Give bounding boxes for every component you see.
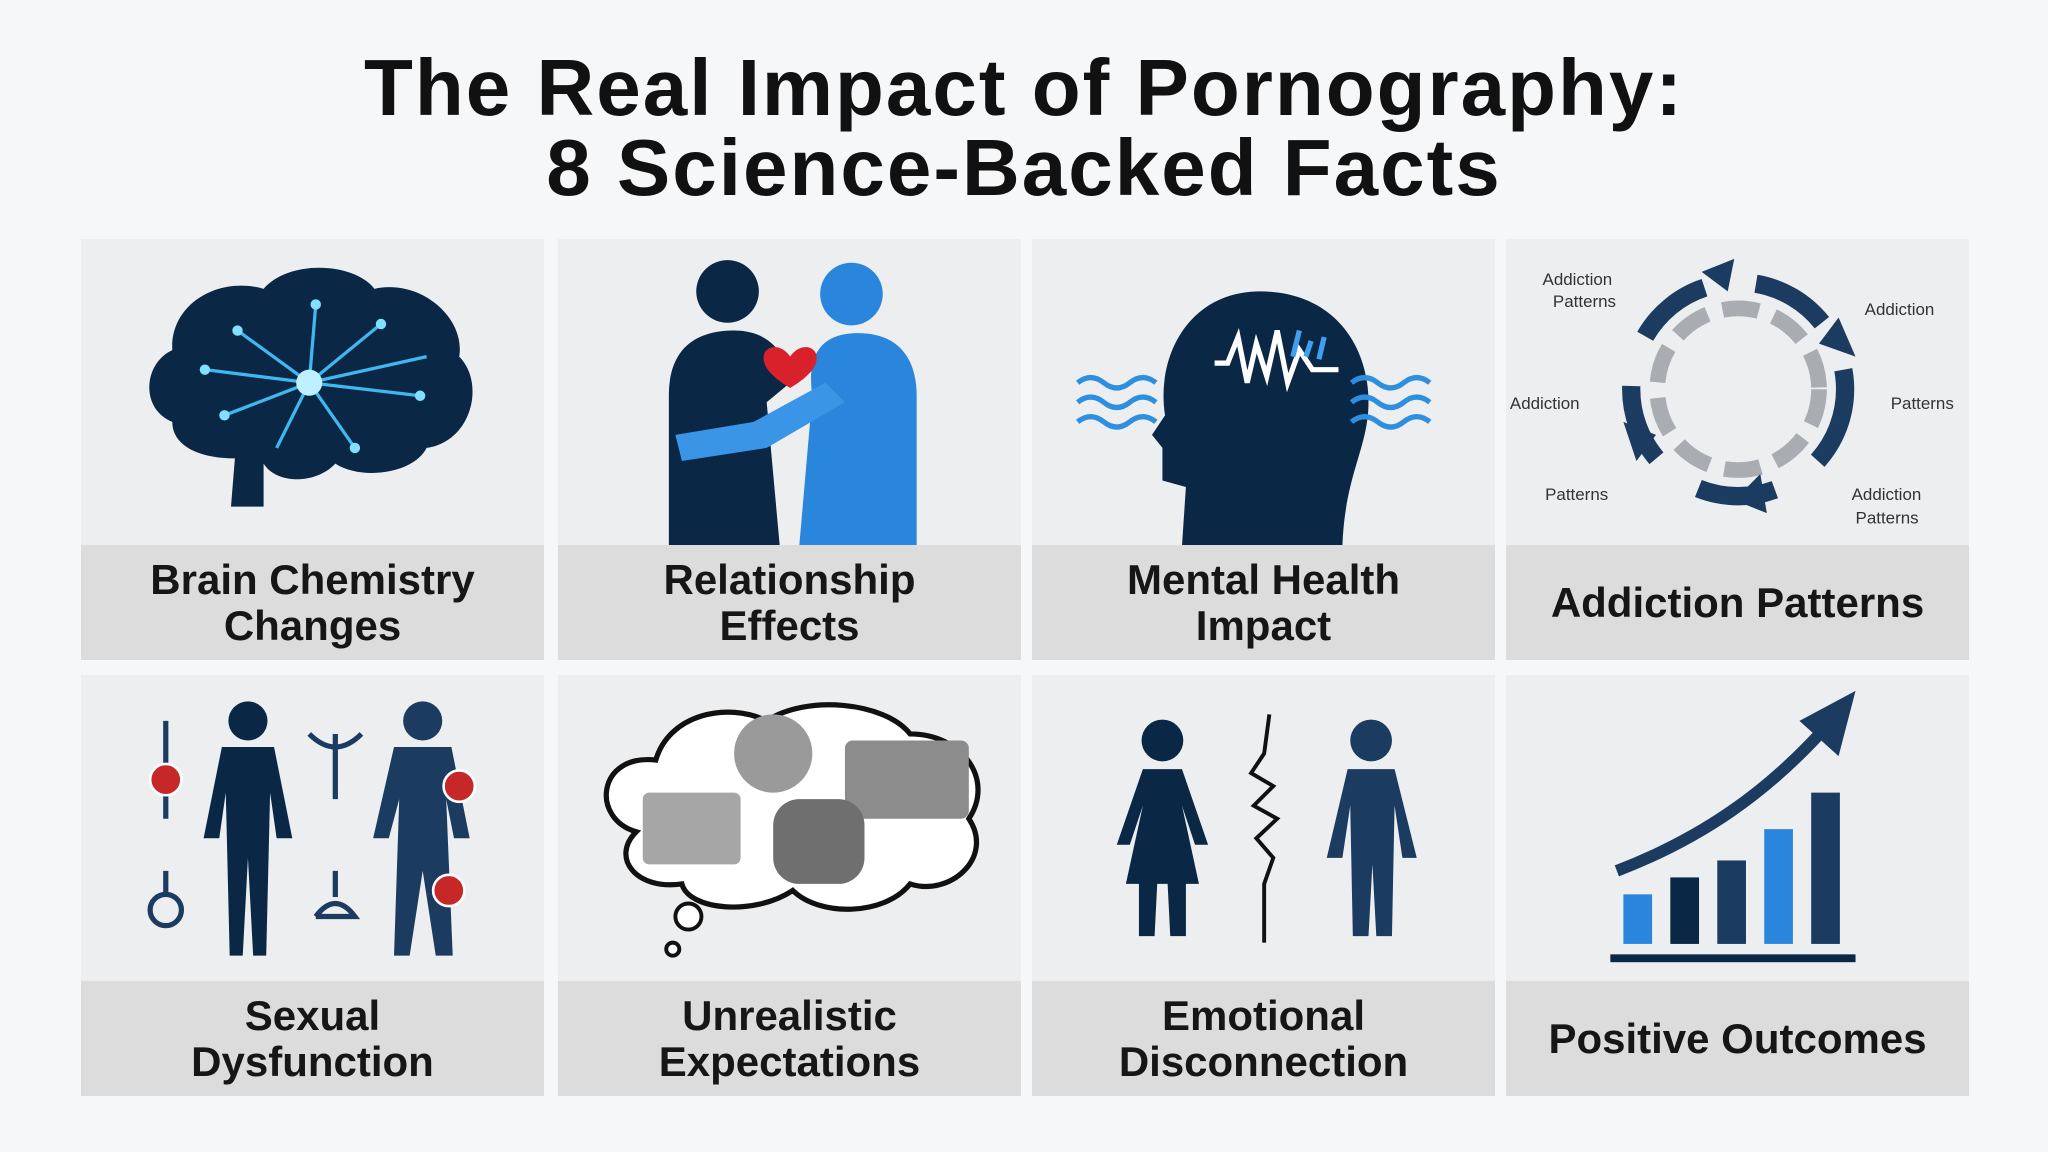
panel: brain chemistry bbox=[81, 239, 544, 660]
icon: cycle arrows: Patterns bbox=[1545, 485, 1608, 504]
label bbox=[1032, 981, 1495, 1096]
icon: cycle arrows: Patterns bbox=[1856, 509, 1919, 528]
label: Changes bbox=[224, 602, 401, 648]
panel: sexual dysfunction bbox=[81, 675, 544, 1096]
icon: couple bbox=[669, 260, 917, 546]
label: Impact bbox=[1196, 602, 1331, 648]
panel: positive outcomes bbox=[1506, 675, 1969, 1096]
label: Relationship bbox=[663, 556, 916, 602]
icon: cycle arrows: Addiction bbox=[1510, 394, 1580, 413]
icon: cycle arrows: Patterns bbox=[1553, 292, 1616, 311]
label bbox=[558, 981, 1021, 1096]
title: The Real Impact of Pornography: bbox=[364, 43, 1684, 132]
panel: relationship bbox=[558, 239, 1021, 660]
label: Sexual bbox=[245, 992, 380, 1038]
icon: head with waves bbox=[1078, 291, 1430, 546]
label: Dysfunction bbox=[191, 1038, 434, 1084]
panel: emotional disconnection bbox=[1032, 675, 1495, 1096]
label: Positive Outcomes bbox=[1548, 1014, 1927, 1062]
label bbox=[81, 545, 544, 660]
label: Emotional bbox=[1162, 992, 1365, 1038]
panel: unrealistic expectations bbox=[558, 675, 1021, 1096]
panel: addiction bbox=[1506, 239, 1969, 660]
label: Mental Health bbox=[1127, 556, 1400, 602]
icon: figures bbox=[150, 701, 475, 956]
label bbox=[1506, 981, 1969, 1096]
label: Addiction Patterns bbox=[1551, 578, 1924, 626]
icon: cycle arrows bbox=[1510, 259, 1954, 528]
title bbox=[364, 43, 1684, 212]
label bbox=[558, 545, 1021, 660]
label: Unrealistic bbox=[682, 992, 897, 1038]
icon: cycle arrows: Addiction bbox=[1852, 485, 1921, 504]
icon: cycle arrows: Addiction bbox=[1865, 300, 1934, 319]
icon: separated figures bbox=[1117, 714, 1417, 943]
icon: brain bbox=[149, 268, 473, 507]
label: Expectations bbox=[659, 1038, 920, 1084]
icon: bar chart with arrow bbox=[1610, 691, 1856, 962]
label bbox=[1506, 545, 1969, 660]
label: Disconnection bbox=[1119, 1038, 1408, 1084]
panel: mental health bbox=[1032, 239, 1495, 660]
label: Brain Chemistry bbox=[150, 556, 475, 602]
icon: cycle arrows: Patterns bbox=[1891, 394, 1954, 413]
label bbox=[1032, 545, 1495, 660]
icon: cycle arrows: Addiction bbox=[1543, 270, 1612, 289]
label: Effects bbox=[719, 602, 860, 648]
title: 8 Science-Backed Facts bbox=[546, 123, 1502, 212]
icon: thought cloud bbox=[606, 705, 978, 956]
label bbox=[81, 981, 544, 1096]
